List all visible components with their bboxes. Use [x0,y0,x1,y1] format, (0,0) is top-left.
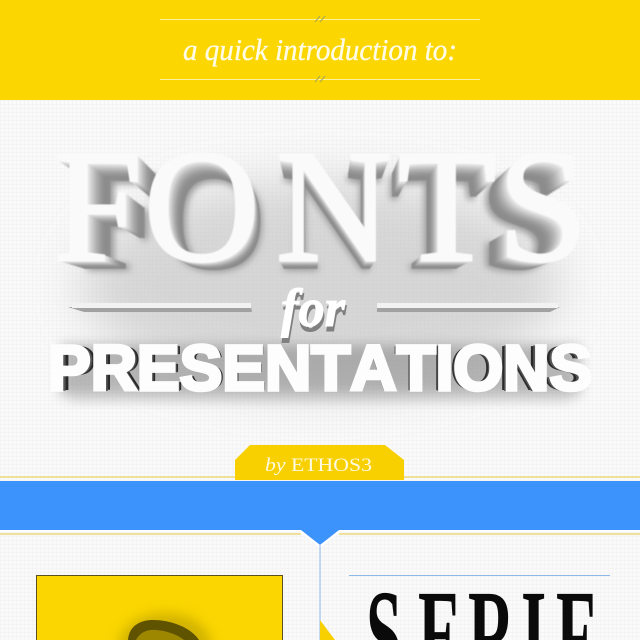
ambient shadow behind title [60,180,580,401]
byline text: by ETHOS3 [265,455,372,476]
title: FONTS: FONTS [72,134,568,299]
header text: a quick introduction to: [183,32,457,67]
right yellow rule [404,476,640,478]
title: FONTS: FONTS [69,131,571,298]
yellow box border [36,576,282,640]
lower right yellow rule [339,533,640,535]
blue band with pointer [0,481,640,545]
left yellow rule [0,476,236,478]
title: FONTS: FONTS [74,135,566,298]
title: FONTS: FONTS [61,124,579,296]
title: FONTS: FONTS [58,122,582,296]
yellow triangle marker [320,620,335,640]
left divider bar [68,303,252,312]
title: FONTS: FONTS [53,117,587,295]
title: for: for [282,283,347,343]
title: FONTS: FONTS [64,127,576,297]
icon: extruded letter top [128,620,199,640]
center vertical divider [320,545,321,640]
byline tab [235,445,404,480]
header band [0,0,640,100]
title: FONTS: FONTS [84,143,556,300]
blue heading rule [349,575,610,576]
title: PRESENTATIONS: PRESENTATIONS [55,334,585,403]
top rule [160,16,480,22]
title: FONTS: FONTS [56,121,584,296]
lower left yellow rule [0,533,301,535]
title: FONTS: FONTS [77,138,563,299]
white band under blue [0,530,640,548]
right divider bar [377,303,560,312]
title: FONTS: FONTS [66,129,574,297]
glyph shadow [119,613,211,640]
title: PRESENTATIONS: PRESENTATIONS [48,332,592,404]
panel: serif heading [370,592,593,640]
title: FONTS: FONTS [80,141,560,300]
panel: yellow sample box [36,575,283,640]
bottom rule [160,76,480,82]
title: PRESENTATIONS: PRESENTATIONS [51,334,589,404]
title: for: for [281,278,346,338]
